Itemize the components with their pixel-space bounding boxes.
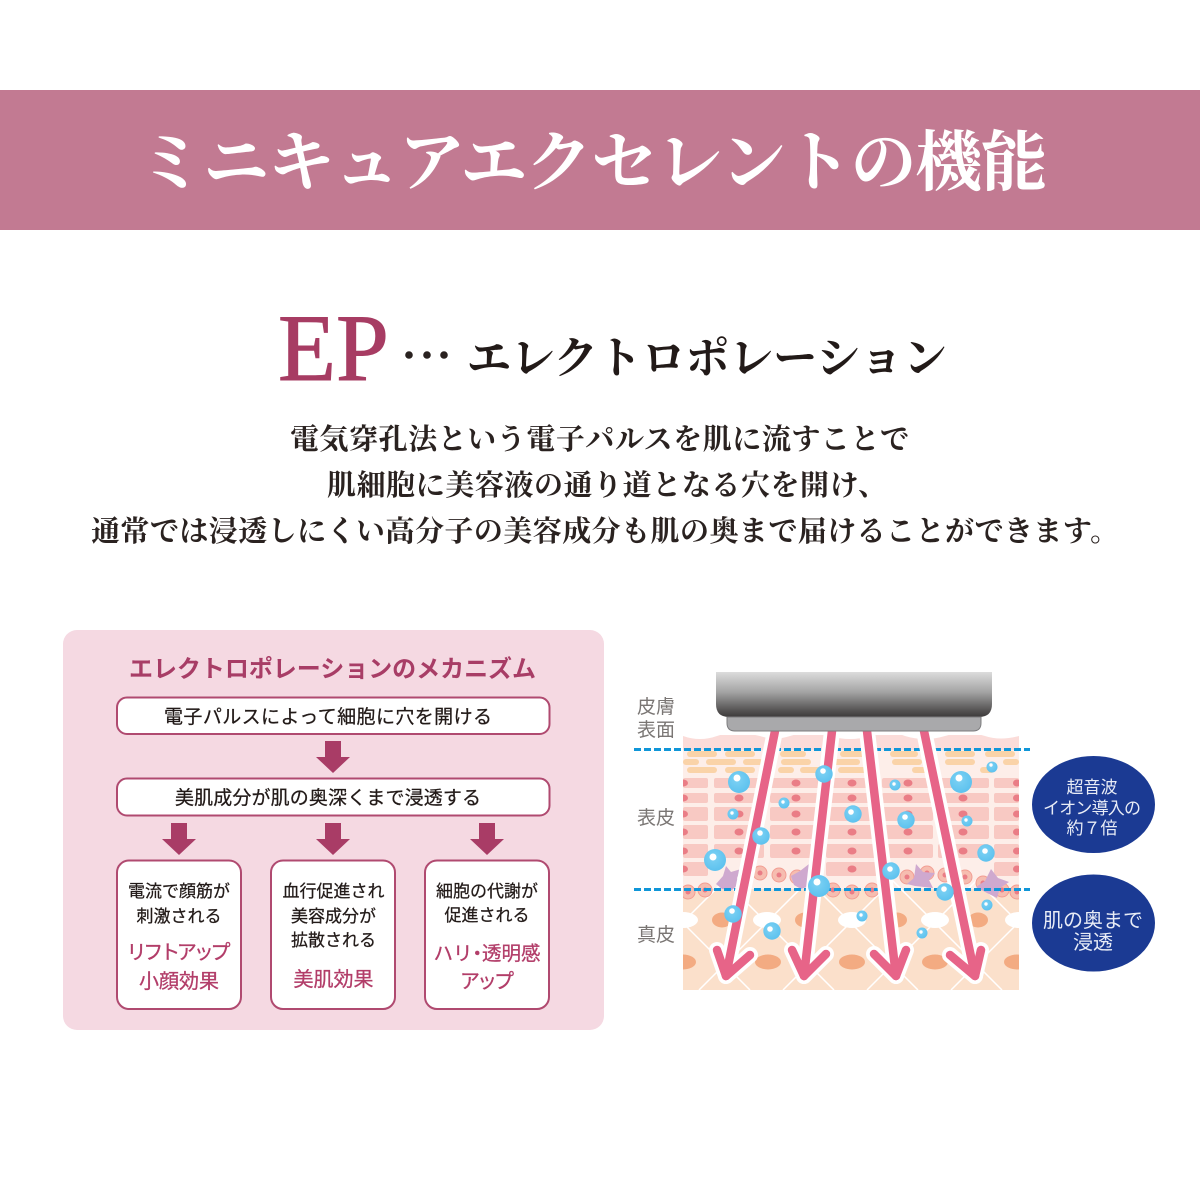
heading: EP electroporation: [278, 295, 947, 401]
card: lift up: 刺激される: [136, 907, 222, 926]
penetration arrows: [717, 731, 981, 976]
card: firmness: アップ: [460, 971, 514, 993]
callout: seven times ultrasonic: 超音波: [1066, 778, 1118, 797]
card: lift up: リフトアップ: [126, 942, 230, 964]
card: beautiful skin: 美容成分が: [291, 907, 376, 926]
basal cells: [681, 866, 1024, 899]
card: firmness: [425, 860, 549, 1009]
skin layer labels: 真皮: [637, 924, 675, 946]
skin cross section: [683, 735, 1019, 990]
card: lift up: 電流で顔筋が: [128, 882, 230, 901]
serum bubbles: [704, 762, 998, 940]
arrow: centre branch: [316, 823, 350, 855]
callout: seven times ultrasonic: イオン導入の: [1043, 799, 1141, 818]
epidermis cells: [683, 778, 1019, 876]
card: beautiful skin: 血行促進され: [282, 882, 384, 901]
heading: EP electroporation: エレクトロポレーション: [467, 334, 947, 383]
callout: seven times ultrasonic: [1032, 756, 1155, 853]
callout: penetrates deep: 肌の奥まで: [1043, 909, 1143, 932]
callout: penetrates deep: 浸透: [1073, 931, 1113, 954]
step 2 box: 美肌成分が肌の奥深くまで浸透する: [175, 787, 481, 809]
title: ミニキュアエクセレントの機能: [138, 127, 1047, 200]
heading: EP electroporation: EP: [278, 295, 389, 401]
card: firmness: 促進される: [444, 906, 530, 925]
step 1 box: 電子パルスによって細胞に穴を開ける: [164, 706, 492, 728]
arrow: left branch: [162, 823, 196, 855]
callout: seven times ultrasonic: 約７倍: [1066, 819, 1118, 838]
description text: [91, 423, 1119, 548]
dashed layer lines: [634, 750, 1030, 890]
skin layer labels: 皮膚: [637, 696, 675, 718]
description text: 肌細胞に美容液の通り道となる穴を開け、: [327, 469, 887, 502]
skin layer labels: 表皮: [637, 807, 675, 829]
skin diagram: [634, 672, 1030, 990]
dermis: [683, 889, 1019, 990]
panel: mechanism: [63, 630, 604, 1030]
step 1 box: [117, 698, 550, 734]
skin layer labels: [637, 696, 675, 946]
card: lift up: 小顔効果: [139, 970, 219, 993]
card: firmness: ハリ・透明感: [433, 943, 541, 965]
card: beautiful skin: 拡散される: [291, 931, 376, 950]
card: beautiful skin: [271, 860, 395, 1009]
card: lift up: [117, 860, 241, 1009]
title band: [0, 90, 1200, 230]
step 2 box: [117, 778, 550, 816]
description text: 通常では浸透しにくい高分子の美容成分も肌の奥まで届けることができます。: [91, 515, 1119, 548]
description text: 電気穿孔法という電子パルスを肌に流すことで: [290, 423, 909, 456]
arrow: right branch: [470, 823, 504, 855]
applicator head: [716, 672, 992, 731]
panel heading: エレクトロポレーションのメカニズム: [129, 655, 536, 683]
callout: penetrates deep: [1032, 874, 1155, 972]
card: beautiful skin: 美肌効果: [294, 968, 374, 991]
skin layer labels: 表面: [637, 719, 675, 741]
arrow: step 1 to 2: [316, 741, 350, 773]
card: firmness: 細胞の代謝が: [436, 882, 538, 901]
